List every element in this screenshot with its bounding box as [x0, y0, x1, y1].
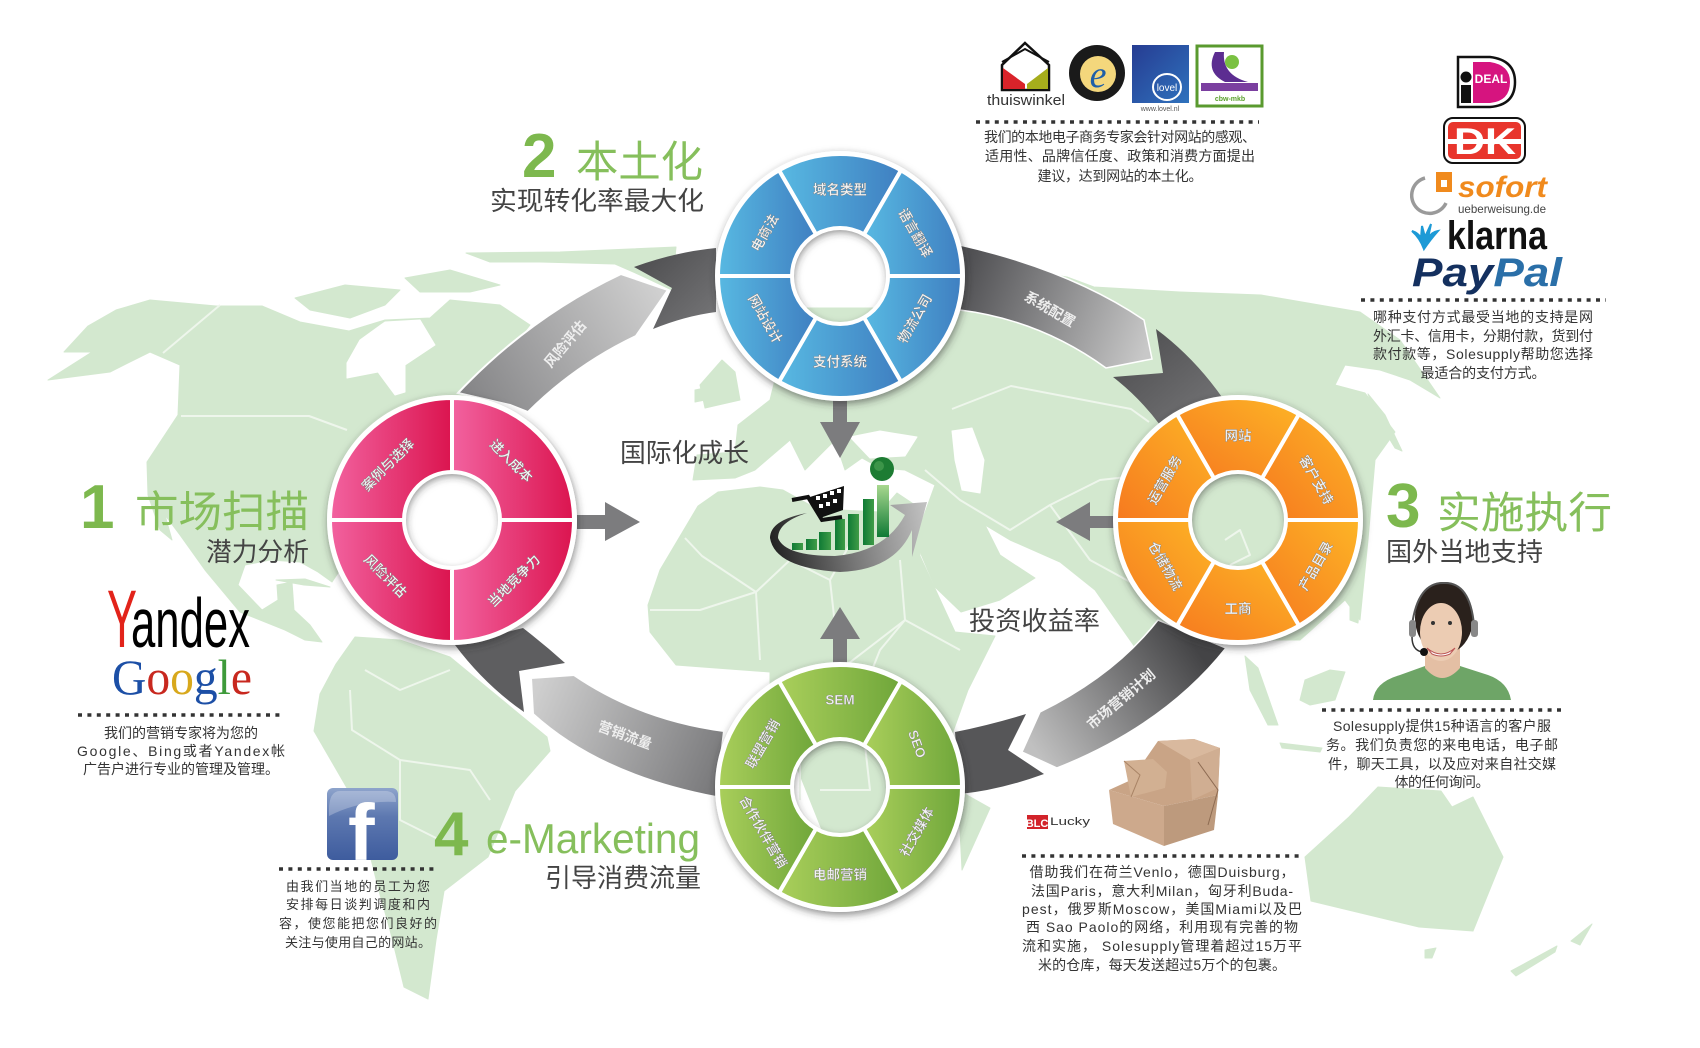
- logo: blue square: www.lovel.nl: [1140, 106, 1180, 113]
- text: local experts: 适用性、品牌信任度、政策和消费方面提出: [985, 148, 1255, 164]
- text: logistics network: 西 Sao Paolo的网络，利用现有完善的物: [1026, 919, 1298, 935]
- text: customer support: [1326, 718, 1558, 790]
- logo: Yandex: Y: [107, 574, 137, 665]
- logo: green framed square: cbw-mkb: [1215, 96, 1245, 103]
- text: customer support: 件，聊天工具，以及应对来自社交媒: [1328, 756, 1556, 772]
- wheel 3: orange: [1113, 395, 1363, 645]
- wheel 4: green: 联盟营销: [742, 716, 783, 771]
- text: customer support: 体的任何询问。: [1394, 774, 1490, 790]
- wheel 2: blue: 网站设计: [745, 292, 785, 347]
- logo: red logistics mark: BLC: [1026, 818, 1048, 830]
- arrow: implementation to marketing: [955, 620, 1226, 794]
- text: social media: 容，使您能把您们良好的: [279, 916, 437, 931]
- logo: Dankort: [1444, 118, 1525, 163]
- heading 3: implementation: [1386, 472, 1612, 567]
- logo: Facebook: [327, 788, 398, 877]
- heading 3: implementation: 实施执行: [1437, 490, 1612, 538]
- wheel 2: blue: [715, 151, 965, 401]
- label: return on investment: 投资收益率: [969, 606, 1100, 636]
- text: logistics network: 流和实施， Solesupply管理着超过15万平: [1022, 938, 1302, 954]
- arrow label: 系统配置: [1022, 288, 1078, 330]
- heading 4: e-Marketing: e-Marketing: [486, 815, 700, 862]
- text: social media: [279, 879, 437, 950]
- logo: Sofort: sofort: [1458, 171, 1549, 204]
- logo: Yandex: [107, 574, 250, 665]
- wheel 3: orange: 产品目录: [1295, 538, 1336, 593]
- arrow: localisation to implementation: [960, 245, 1224, 425]
- text: local experts: 建议，达到网站的本土化。: [1038, 168, 1202, 184]
- arrow: green to centre: [820, 607, 860, 664]
- heading 2: localisation: 实现转化率最大化: [490, 186, 704, 216]
- text: local experts: [984, 129, 1256, 184]
- logo: green framed square: [1197, 46, 1262, 106]
- logo: iDEAL: DEAL: [1475, 72, 1507, 86]
- logo: Yandex: andex: [131, 584, 250, 662]
- heading 2: localisation: [490, 122, 704, 216]
- wheel 2: blue: 语言翻译: [895, 205, 936, 261]
- logo: red logistics mark: [1026, 815, 1091, 830]
- logo: Thuiswinkel: thuiswinkel: [987, 92, 1065, 109]
- wheel 3: orange: 仓储物流: [1145, 538, 1186, 594]
- logo: PayPal: Pay Pal: [1412, 251, 1563, 295]
- logo: Facebook: f: [348, 788, 375, 877]
- heading 1: market scan: 市场扫描: [135, 489, 309, 537]
- arrow label: 营销流量: [596, 718, 654, 752]
- heading 4: e-Marketing: [434, 800, 701, 893]
- wheel 3: orange: 客户支持: [1296, 452, 1337, 508]
- wheel 4: green: 电邮营销: [813, 866, 867, 882]
- logo: Sofort: ueberweisung.de: [1458, 202, 1546, 216]
- logo: Sofort: [1412, 171, 1549, 216]
- text: social media: 由我们当地的员工为您: [286, 879, 430, 894]
- heading 1: market scan: 1: [80, 473, 114, 542]
- heading 3: implementation: 3: [1386, 472, 1420, 541]
- heading 2: localisation: 本土化: [576, 139, 703, 187]
- wheel 3: orange: 网站: [1224, 428, 1252, 444]
- text: social media: 关注与使用自己的网站。: [285, 935, 431, 950]
- wheel 3: orange: 运营服务: [1144, 452, 1185, 507]
- wheel 4: green: SEO: [905, 728, 929, 760]
- heading 1: market scan: 潜力分析: [206, 537, 309, 567]
- wheel 2: blue: 物流公司: [894, 291, 935, 346]
- arrow: orange to centre: [1056, 502, 1120, 541]
- text: logistics network: 法国Paris，意大利Milan，匈牙利Buda-: [1031, 883, 1293, 899]
- text: payment methods: 外汇卡、信用卡，分期付款，货到付: [1373, 328, 1593, 344]
- wheel 4: green: 社交媒体: [896, 804, 937, 859]
- logo: iDEAL: [1458, 57, 1515, 107]
- text: logistics network: 借助我们在荷兰Venlo，德国Duisburg，: [1030, 864, 1294, 880]
- wheel 4: green: SEM: [825, 692, 855, 708]
- text: payment methods: 款付款等，Solesupply帮助您选择: [1373, 346, 1593, 362]
- wheel 1: pink: 当地竞争力: [484, 551, 543, 610]
- label: international growth: 国际化成长: [620, 438, 749, 468]
- heading 4: e-Marketing: 4: [434, 800, 469, 869]
- image: support agent with headset: [1373, 582, 1511, 700]
- wheel 1: pink: 进入成本: [487, 436, 536, 486]
- text: customer support: 务。我们负责您的来电电话，电子邮: [1326, 737, 1558, 753]
- text: local experts: 我们的本地电子商务专家会针对网站的感观、: [984, 129, 1256, 145]
- wheel 2: blue: 电商法: [748, 211, 782, 254]
- heading 1: market scan: [80, 473, 309, 567]
- logo: Klarna: klarna: [1447, 214, 1548, 258]
- text: search marketing: 我们的营销专家将为您的: [104, 725, 258, 741]
- text: customer support: Solesupply提供15种语言的客户服: [1333, 718, 1551, 734]
- wheel 2: blue: 域名类型: [813, 182, 867, 198]
- text: logistics network: pest，俄罗斯Moscow，美国Miami以及巴: [1022, 901, 1302, 917]
- text: logistics network: [1022, 864, 1302, 973]
- wheel 1: pink: [327, 395, 577, 645]
- text: payment methods: 最适合的支付方式。: [1420, 365, 1546, 381]
- text: social media: 安排每日谈判调度和内: [286, 897, 430, 912]
- text: payment methods: [1373, 309, 1593, 381]
- wheel 4: green: [715, 662, 965, 912]
- logo: Google: Google: [112, 649, 252, 705]
- heading 4: e-Marketing: 引导消费流量: [545, 863, 701, 893]
- logo: Klarna: [1412, 214, 1548, 258]
- world map background: [48, 247, 1592, 999]
- text: logistics network: 米的仓库，每天发送超过5万个的包裹。: [1038, 957, 1286, 973]
- wheel 3: orange: 工商: [1224, 600, 1252, 616]
- text: payment methods: 哪种支付方式最受当地的支持是网: [1373, 309, 1593, 325]
- logo: Trusted Shops: e: [1090, 54, 1107, 96]
- arrow: blue to centre: [820, 400, 860, 458]
- arrow: marketing to market scan: [455, 628, 724, 797]
- wheel 4: green: 合作伙伴营销: [736, 793, 791, 871]
- logo: red logistics mark: Lucky: [1050, 816, 1091, 828]
- icon: shopping cart with growth bars: [770, 457, 927, 572]
- text: search marketing: [77, 725, 285, 777]
- arrow label: 风险评估: [541, 317, 589, 371]
- logo: Dankort: DK: [1454, 121, 1516, 162]
- arrow: market scan to localisation: [458, 248, 716, 412]
- image: cardboard boxes: [1109, 739, 1220, 846]
- heading 2: localisation: 2: [522, 122, 556, 191]
- text: search marketing: 广告户进行专业的管理及管理。: [83, 761, 279, 777]
- logo: blue square: [1132, 45, 1189, 113]
- logo: Trusted Shops: [1069, 45, 1125, 101]
- wheel 2: blue: 支付系统: [813, 354, 867, 370]
- arrow label: 市场营销计划: [1084, 666, 1158, 732]
- text: search marketing: Google、Bing或者Yandex帐: [77, 743, 285, 759]
- wheel 1: pink: 案例与选择: [358, 435, 418, 494]
- wheel 1: pink: 风险评估: [361, 551, 410, 601]
- logo: Thuiswinkel: [987, 43, 1065, 109]
- arrow: pink to centre: [577, 502, 640, 541]
- heading 3: implementation: 国外当地支持: [1386, 537, 1543, 567]
- logo: blue square: lovel: [1157, 83, 1177, 94]
